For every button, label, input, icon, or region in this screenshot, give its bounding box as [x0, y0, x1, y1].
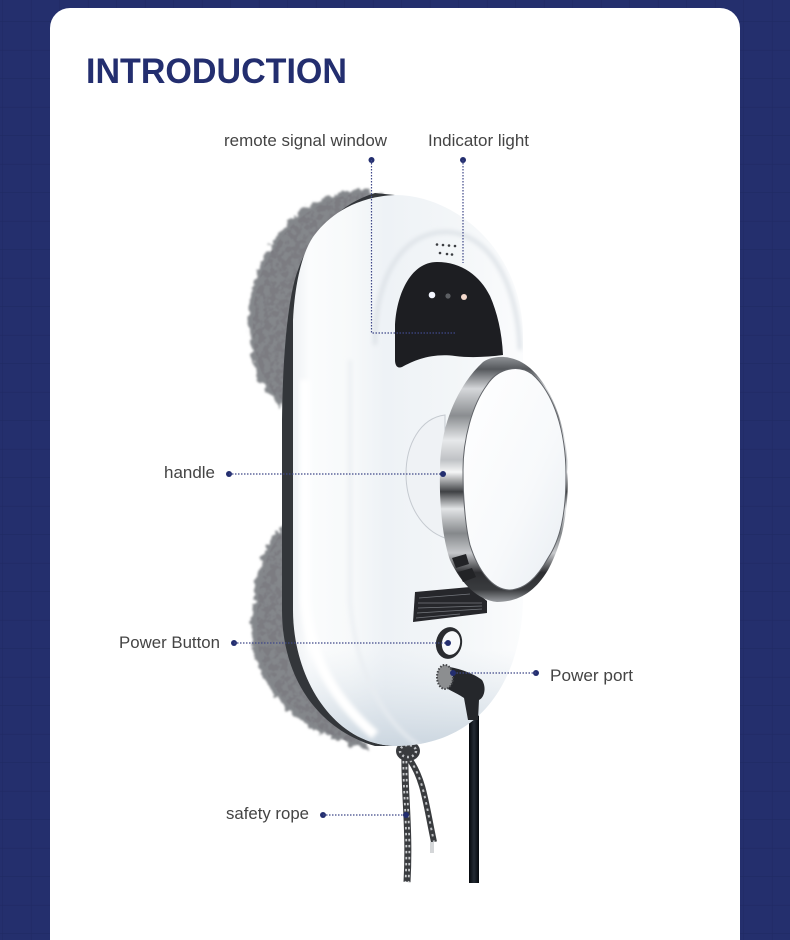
handle slots — [452, 554, 476, 582]
chrome ring — [440, 357, 568, 602]
callout: indicator light — [428, 132, 529, 263]
callout: handle: handle — [164, 464, 215, 482]
callout: remote signal window: remote signal window — [224, 132, 387, 150]
safety rope — [396, 741, 434, 882]
upper cleaning pad — [248, 189, 385, 410]
title: INTRODUCTION — [86, 51, 347, 91]
power cable — [469, 715, 479, 883]
callout: remote signal window — [224, 132, 455, 333]
white shell — [293, 195, 523, 746]
robot body — [282, 193, 530, 750]
power connector — [437, 665, 485, 720]
callout: power button: Power Button — [119, 634, 220, 652]
warning label — [413, 587, 487, 622]
dark side strip — [282, 193, 395, 746]
handle base — [406, 415, 445, 538]
callout: power port — [450, 667, 633, 685]
indicator lights — [429, 292, 467, 300]
speaker holes — [436, 243, 456, 256]
callout: power button — [119, 634, 451, 652]
handle — [406, 357, 568, 602]
callout: power port: Power port — [550, 667, 633, 685]
white cover plate — [463, 369, 566, 590]
display window — [395, 262, 503, 368]
shell shading — [290, 232, 530, 750]
power button — [433, 625, 465, 661]
callout: safety rope: safety rope — [226, 805, 309, 823]
lower cleaning pad — [252, 522, 368, 749]
callout: indicator light: Indicator light — [428, 132, 529, 150]
callout: handle — [164, 464, 446, 482]
callout: safety rope — [226, 805, 409, 823]
